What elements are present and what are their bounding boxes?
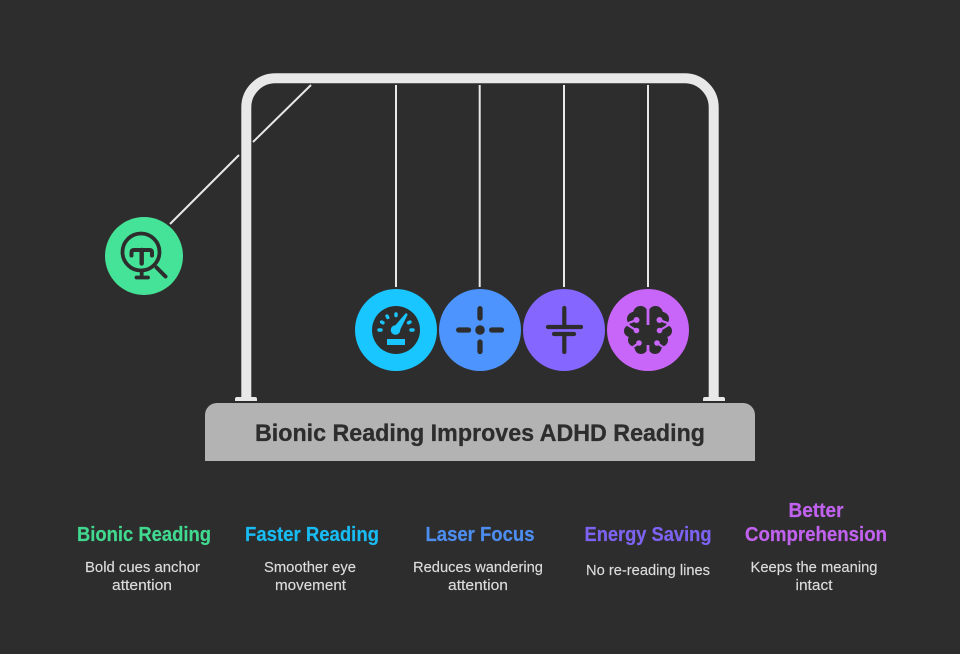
label: Better Comprehension: intact: [796, 577, 833, 594]
icon: magnifier with letter T: [105, 217, 183, 295]
label: Better Comprehension: Better: [788, 500, 844, 522]
title plate: [205, 403, 755, 461]
label: Better Comprehension: Keeps the meaning: [750, 559, 878, 576]
label: Bionic Reading: Bionic Reading: [77, 524, 211, 546]
label: Laser Focus: attention: [448, 577, 508, 594]
hanging strings: [396, 85, 648, 287]
label: Energy Saving: [584, 524, 712, 579]
label: Laser Focus: Laser Focus: [426, 524, 534, 546]
label: Better Comprehension: [745, 500, 887, 594]
label: Bionic Reading: [77, 524, 211, 594]
label: Laser Focus: [413, 524, 543, 594]
label: Bionic Reading: Bold cues anchor: [85, 559, 200, 576]
label: Faster Reading: Smoother eye: [264, 559, 356, 576]
icon: speedometer: [355, 289, 437, 371]
title: Bionic Reading Improves ADHD Reading: [255, 420, 705, 447]
icon: brain: [607, 289, 689, 371]
label: Energy Saving: Energy Saving: [584, 524, 712, 546]
label: Faster Reading: movement: [275, 577, 347, 594]
icon: battery cell symbol: [523, 289, 605, 371]
icon: crosshair focus: [439, 289, 521, 371]
label: Faster Reading: [245, 524, 379, 594]
label: Better Comprehension: Comprehension: [745, 524, 887, 546]
label: Energy Saving: No re-reading lines: [586, 562, 710, 579]
label: Laser Focus: Reduces wandering: [413, 559, 543, 576]
label: Faster Reading: Faster Reading: [245, 524, 379, 546]
swinging string: [170, 85, 311, 224]
label: Bionic Reading: attention: [112, 577, 172, 594]
cradle frame: [235, 78, 725, 401]
